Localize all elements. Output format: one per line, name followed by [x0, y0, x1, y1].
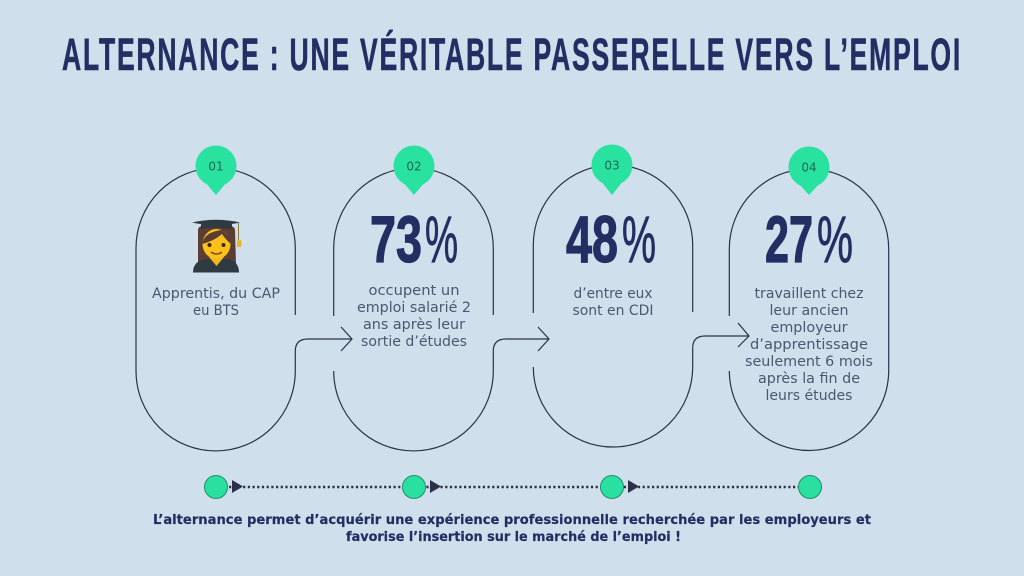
text: step 1 description: [152, 286, 280, 319]
stat: 27%: %: [817, 202, 853, 276]
stat: 73%: 73: [370, 202, 422, 276]
pin: 02: [394, 146, 434, 195]
text: step 4 description: après la fin de: [758, 371, 860, 387]
text: step 4 description: d’apprentissage: [750, 337, 868, 353]
text: step 2 description: ans après leur: [363, 317, 465, 333]
icon: graduate student: [192, 220, 242, 272]
text: conclusion: [153, 513, 871, 545]
stat: 48%: 48: [566, 202, 618, 276]
text: step 3 description: [572, 286, 654, 319]
text: step 4 description: travaillent chez: [754, 286, 864, 302]
pin: 03: [592, 144, 632, 195]
text: step 4 description: leurs études: [766, 388, 852, 404]
pin: 03: 03: [604, 158, 620, 172]
timeline: [204, 476, 822, 498]
text: step 4 description: leur ancien: [770, 303, 848, 319]
text: step 4 description: employeur: [770, 320, 848, 336]
text: step 2 description: emploi salarié 2: [357, 300, 471, 316]
text: step 4 description: seulement 6 mois: [745, 354, 873, 370]
panel: step 1 outline with arrow: [136, 168, 352, 451]
pin: 01: [196, 146, 236, 195]
pin: 04: [788, 146, 830, 195]
pin: 04: 04: [801, 160, 817, 174]
stat: 27%: 27: [765, 202, 813, 276]
text: conclusion: favorise l’insertion sur le marché de l’emploi !: [346, 530, 681, 545]
pin: 01: 01: [208, 160, 224, 174]
text: step 1 description: eu BTS: [193, 303, 239, 319]
text: step 4 description: [745, 286, 873, 404]
stat: 48%: %: [622, 202, 656, 276]
stat: 73%: %: [425, 202, 458, 276]
panel: step 4 outline: [729, 169, 889, 451]
panel: step 2 outline with arrow: [334, 168, 549, 451]
text: step 3 description: sont en CDI: [572, 303, 654, 319]
text: step 2 description: occupent un: [368, 283, 460, 299]
text: conclusion: L’alternance permet d’acquérir une expérience professionnelle recherchée par les employeurs et: [153, 513, 871, 528]
text: step 1 description: Apprentis, du CAP: [152, 286, 280, 302]
text: step 2 description: [357, 283, 471, 350]
text: step 3 description: d’entre eux: [574, 286, 652, 302]
pin: 02: 02: [406, 160, 422, 174]
panel: step 3 outline with arrow: [533, 165, 749, 447]
text: step 2 description: sortie d’études: [361, 334, 467, 350]
